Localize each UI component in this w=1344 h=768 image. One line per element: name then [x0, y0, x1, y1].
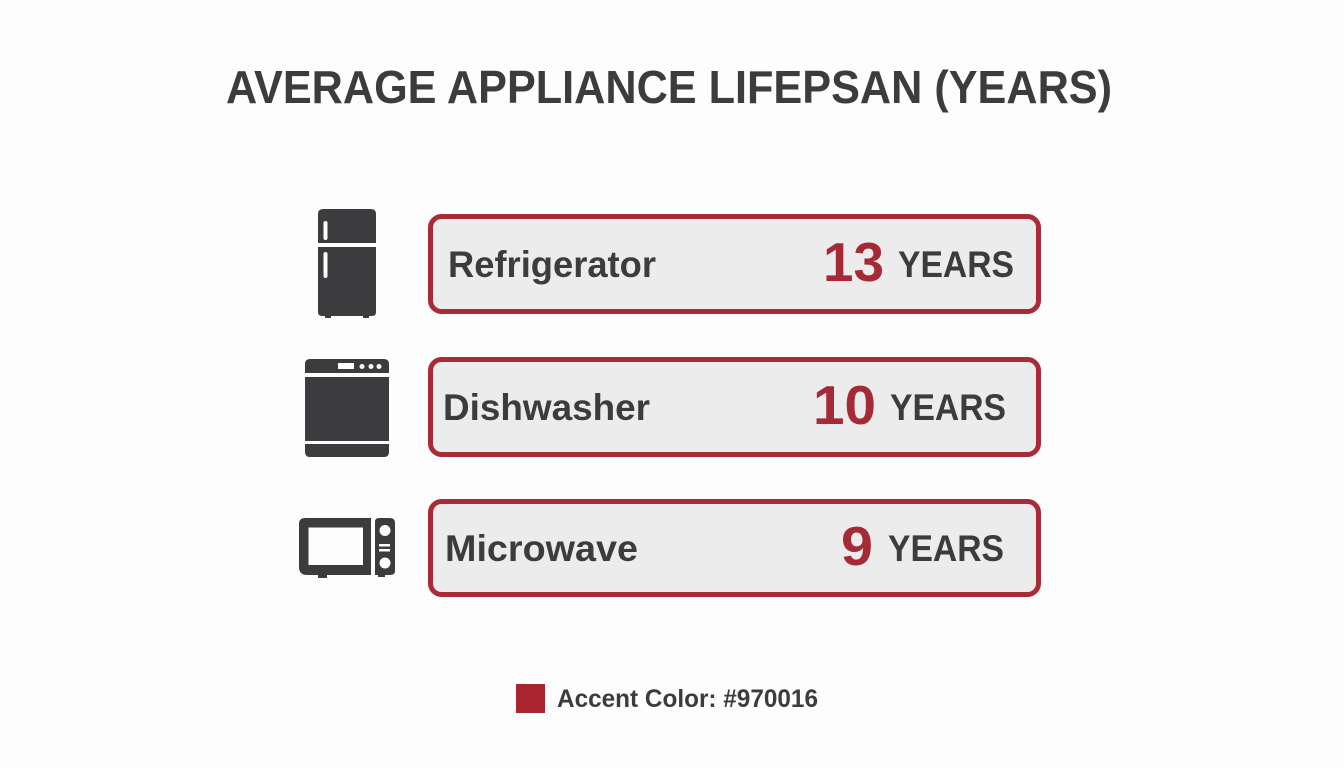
unit: years: YEARS: [898, 244, 1014, 285]
value: 13: 13: [823, 231, 884, 293]
panel: microwave: [430, 502, 1038, 594]
panel: dishwasher: [430, 360, 1038, 454]
icon: dishwasher: [305, 359, 389, 457]
icon: refrigerator: [318, 209, 376, 318]
label: refrigerator: Refrigerator: [448, 244, 656, 285]
label: microwave: Microwave: [445, 528, 638, 569]
panel: refrigerator: [430, 216, 1038, 312]
legend swatch: [516, 684, 545, 713]
legend text: Accent Color: #970016: [557, 685, 818, 713]
unit: years: YEARS: [890, 387, 1006, 428]
title: AVERAGE APPLIANCE LIFEPSAN (YEARS): [226, 61, 1112, 113]
icon: microwave: [299, 518, 395, 578]
unit: years: YEARS: [888, 528, 1004, 569]
value: 10: 10: [813, 374, 876, 436]
label: dishwasher: Dishwasher: [443, 387, 650, 428]
value: 9: 9: [841, 515, 873, 577]
legend: accent color: [516, 684, 818, 713]
